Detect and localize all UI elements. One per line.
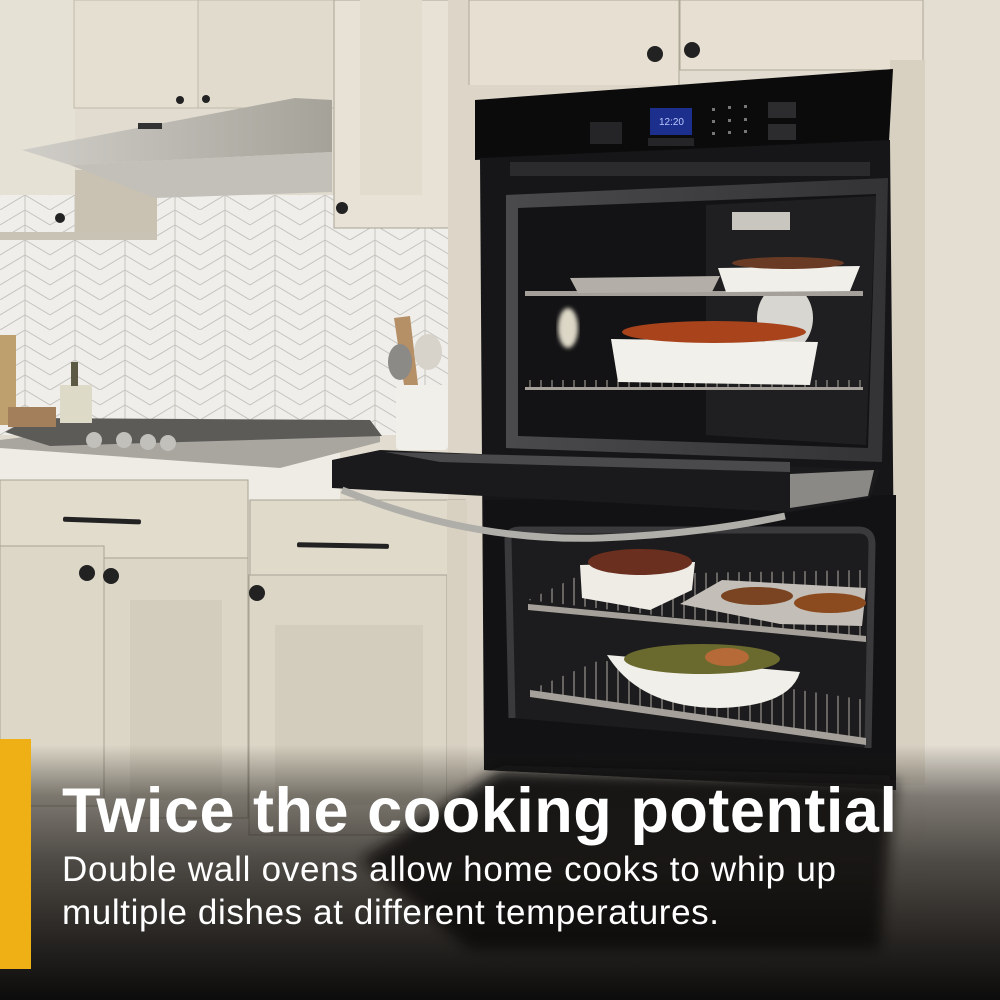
oven cabinet surround — [465, 0, 1000, 1000]
subtitle: Double wall ovens allow home cooks to whip up — [62, 850, 836, 889]
countertop and cooktop — [0, 418, 382, 500]
range hood — [0, 98, 332, 240]
middle rack with baking dish — [525, 321, 863, 390]
subtitle: multiple dishes at different temperatures. — [62, 893, 719, 932]
open upper oven door — [332, 450, 880, 538]
accent bar — [0, 739, 31, 969]
oven control panel — [475, 69, 893, 160]
countertop objects: utensils and bottle — [0, 316, 448, 450]
bottom dark gradient — [0, 745, 1000, 1000]
top rack with dishes — [525, 257, 863, 296]
upper oven cavity — [506, 178, 888, 462]
lower-rack with round dish — [530, 644, 866, 745]
lower cabinets — [0, 480, 467, 835]
title: Twice the cooking potential — [62, 776, 897, 846]
oven control panel: 12:20 — [659, 117, 684, 128]
lower oven cavity — [484, 495, 896, 790]
upper cabinets left — [0, 0, 470, 760]
backsplash: chevron tile — [0, 195, 450, 435]
subtitle — [62, 850, 836, 932]
oven body — [480, 140, 896, 790]
open lower oven door blurred — [360, 770, 895, 950]
upper lower-rack with dishes — [528, 549, 866, 642]
wall oven — [332, 69, 896, 950]
